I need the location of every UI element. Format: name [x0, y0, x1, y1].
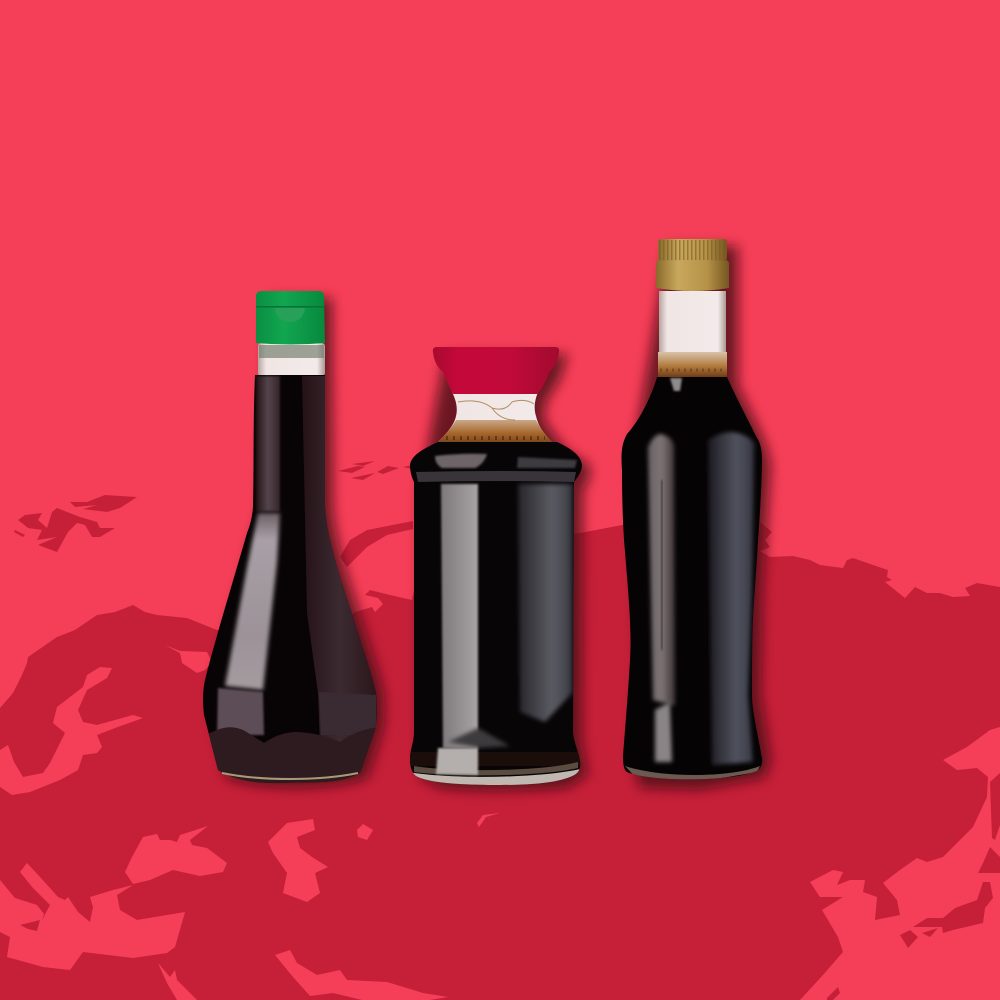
map: Caspian sea — [268, 819, 328, 902]
map: lake Balkhash — [477, 813, 500, 827]
map: Shikoku — [922, 928, 938, 937]
map: Franz Josef islands — [338, 461, 412, 480]
bottle 2 left glint — [441, 484, 478, 748]
map: Taiwan — [827, 987, 840, 1000]
map: Sakhalin — [990, 773, 1000, 840]
bottle 2 base glare — [448, 728, 510, 748]
bottle 2: red spout — [405, 347, 590, 791]
bottle 1 cap notch — [275, 308, 305, 322]
bottle 1 lower mauve panel — [217, 688, 264, 735]
map: Baltic sea — [0, 667, 143, 795]
bottle 2 foot inner — [414, 762, 578, 775]
map: Kyushu — [900, 930, 918, 948]
bottle 1 shadow — [212, 298, 385, 788]
bottle 2 base fill — [405, 440, 585, 790]
bottle 3 left glint — [648, 434, 675, 706]
bottle 3 neck glass — [659, 291, 726, 353]
bottle 2 body — [405, 440, 585, 790]
map: Severnaya island — [758, 522, 772, 552]
bottle 2 neck — [436, 392, 552, 444]
map: Svalbard main island — [18, 508, 115, 552]
bottle 3 knurled cap top base — [658, 239, 727, 261]
bottle 2 neck bubbles — [458, 400, 534, 420]
bottle 1 base fill — [200, 375, 380, 785]
bottle 3 foam speckle — [660, 368, 725, 372]
bottle 1 neck glass — [258, 343, 325, 376]
bottle 1: green cap — [200, 291, 385, 788]
bottle 2 right glint — [518, 484, 573, 722]
bottle 1 neck highlight — [256, 376, 280, 511]
infographic canvas — [0, 237, 1000, 1000]
bottle 2 right shoulder glint — [517, 457, 577, 468]
map: Hokkaido — [978, 847, 1000, 873]
bottle 3 knurling — [659, 240, 726, 260]
map: Svalbard sliver — [14, 530, 25, 537]
bottle 1 left highlight — [225, 513, 280, 690]
bottle 3 lower glint — [655, 702, 672, 762]
bottle 3: gold cap — [618, 239, 771, 790]
bottle 3 neck glint — [670, 378, 682, 391]
bottle 1 glass foot — [222, 773, 358, 779]
map: main landmass — [0, 525, 1000, 1000]
bottle 2 shoulder band — [416, 471, 576, 482]
bottle 2 red spout — [433, 347, 559, 394]
bottle 3 gold cap — [656, 260, 729, 291]
map: White sea — [165, 645, 212, 673]
bottle 1 lower right panel — [319, 692, 376, 735]
map: Honshu — [913, 882, 993, 933]
bottle 1 neck thread — [259, 345, 324, 358]
map: Svalbard north island — [70, 495, 137, 512]
map: Sicily — [20, 920, 40, 931]
map of Eurasia — [0, 461, 1000, 1000]
bottle 1 green cap — [256, 291, 325, 344]
map: Pacific and Sea of Japan — [800, 727, 1000, 1000]
bottle 3 sauce foam — [658, 352, 727, 378]
bottle 1 right panel — [302, 376, 378, 745]
bottle 2 left shoulder glint — [435, 454, 487, 468]
bottle 2 foam speckle — [446, 436, 545, 440]
bottle 3 glass foot — [625, 766, 760, 780]
bottle 3 glint dark line — [661, 480, 662, 650]
bottle 3 right glint — [708, 432, 755, 765]
bottle 2 shadow — [420, 354, 590, 791]
bottle 3 shadow — [632, 246, 771, 790]
bottle 1 cap seam — [256, 306, 324, 308]
bottle 2 sediment band — [410, 752, 585, 766]
bottle 3 base fill — [618, 375, 768, 785]
bottle 1 body — [200, 375, 380, 785]
map: Persian Gulf — [275, 950, 448, 1000]
map: Novaya Zemlya — [340, 521, 413, 567]
bottle 1 scalloped base — [205, 727, 378, 785]
map: Aral sea — [357, 824, 373, 840]
bottle 2 front glass facet — [436, 748, 478, 775]
bottle 3 body — [618, 375, 768, 785]
bottle 2 foot glass — [413, 769, 580, 785]
bottle 2 sauce foam — [434, 420, 556, 446]
map: Red sea — [158, 963, 197, 1000]
map: Mediterranean — [0, 863, 185, 970]
map: Black sea — [125, 826, 227, 884]
